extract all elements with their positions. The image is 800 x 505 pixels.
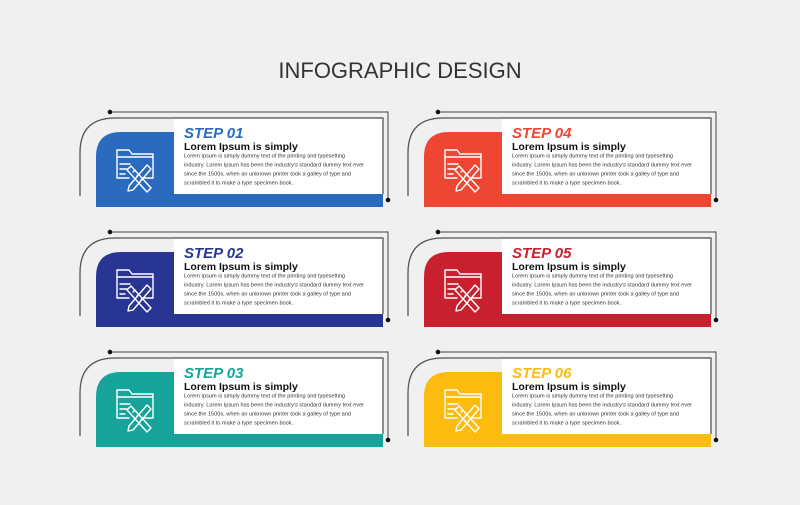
card: step 02: Lorem Ipsum is simply	[184, 261, 298, 273]
card: step 03	[80, 350, 390, 447]
card: step 05: Lorem Ipsum is simply	[512, 261, 626, 273]
card: step 01: STEP 01	[184, 125, 243, 142]
card: step 06: Lorem Ipsum is simply	[512, 381, 626, 393]
title: INFOGRAPHIC DESIGN	[278, 58, 522, 83]
card: step 05: STEP 05	[512, 245, 572, 262]
card: step 04	[408, 110, 718, 207]
card: step 04: Lorem Ipsum is simply	[512, 141, 626, 153]
card: step 03: Lorem Ipsum is simply	[184, 381, 298, 393]
card: step 04: STEP 04	[512, 125, 572, 142]
card: step 06: STEP 06	[512, 365, 572, 382]
card: step 01: Lorem Ipsum is simply	[184, 141, 298, 153]
card: step 02: STEP 02	[184, 245, 244, 262]
card: step 02	[80, 230, 390, 327]
card: step 01	[80, 110, 390, 207]
card: step 05	[408, 230, 718, 327]
card: step 06	[408, 350, 718, 447]
card: step 03: STEP 03	[184, 365, 244, 382]
